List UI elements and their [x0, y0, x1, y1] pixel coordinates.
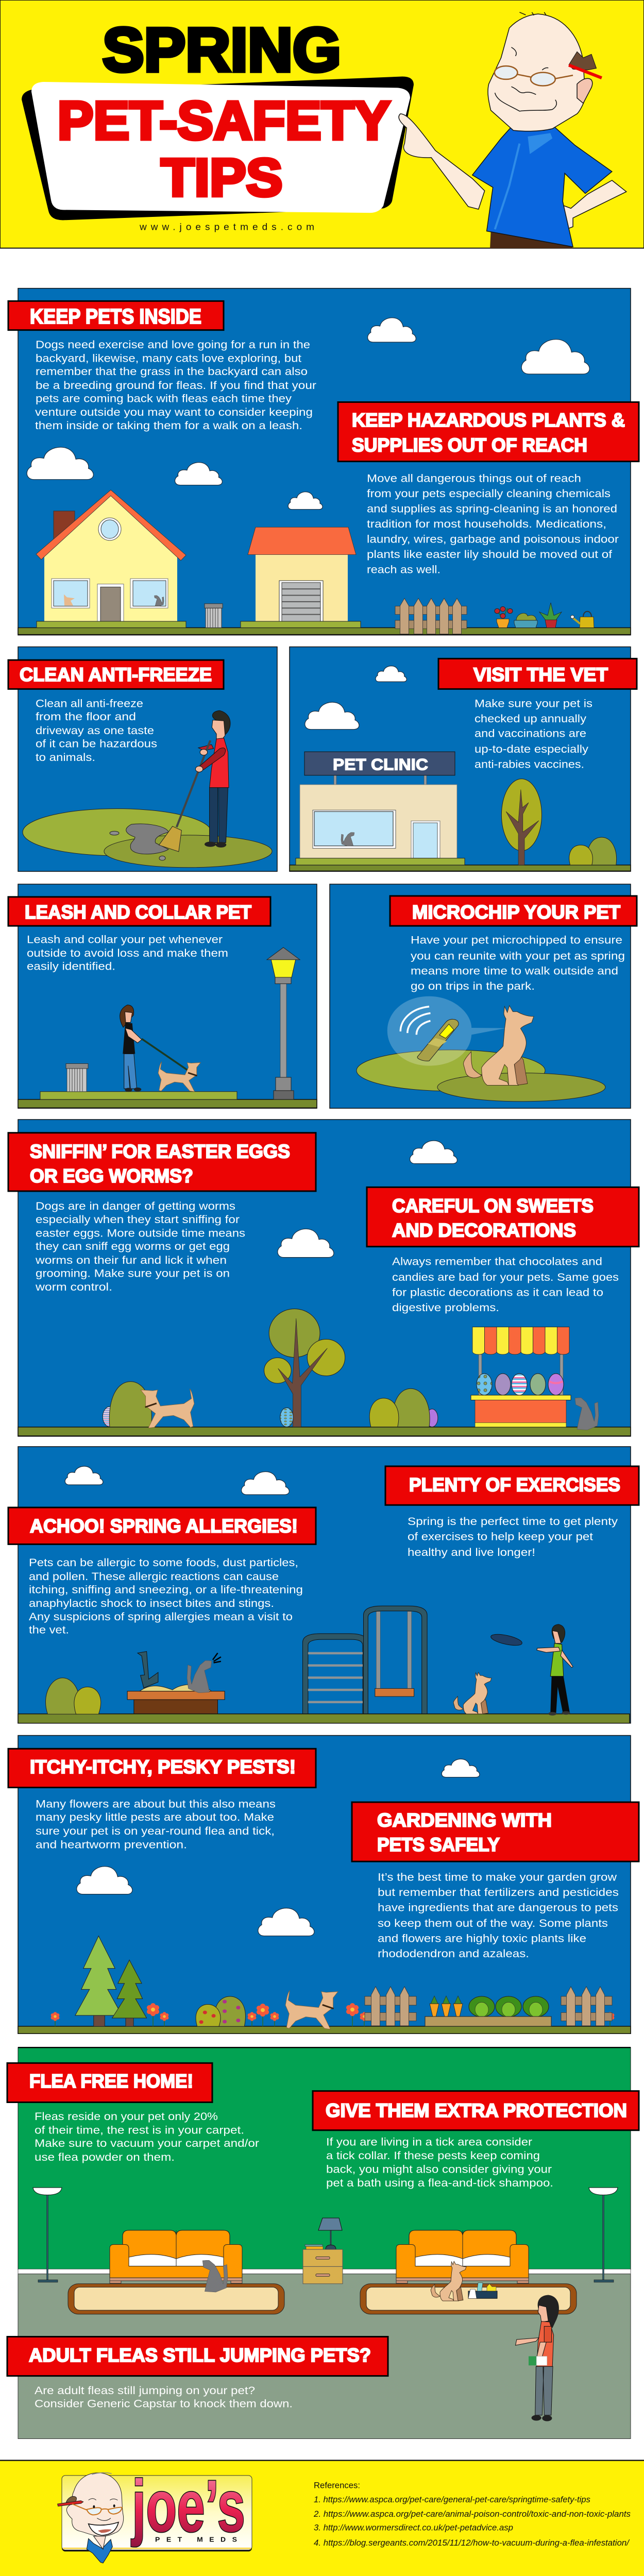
- title: tips: TIPS: [161, 149, 283, 208]
- text: leash and collar: outside to avoid loss and make them: [27, 947, 228, 959]
- heading: keep hazardous plants: SUPPLIES OUT OF REACH: [352, 435, 587, 456]
- text: clean anti-freeze: driveway as one taste: [36, 724, 154, 737]
- text: exercises: Spring is the perfect time to get plenty: [408, 1516, 618, 1528]
- text: allergies: the vet.: [29, 1624, 69, 1636]
- title: pet-safety: PET-SAFETY: [58, 90, 391, 150]
- text: flea free home: Make sure to vacuum your carpet and/or: [35, 2138, 259, 2149]
- illustration: tree and bushes: [501, 779, 617, 865]
- text: egg worms: worm control.: [35, 1281, 112, 1293]
- text: egg worms: [35, 1200, 245, 1293]
- logo mascot: [58, 2473, 124, 2563]
- text: egg worms: they can sniff egg worms or get egg: [36, 1241, 230, 1252]
- references: [313, 2481, 631, 2548]
- heading: clean anti-freeze: [8, 660, 224, 689]
- illustration: pine trees and berry bushes: [75, 1936, 245, 2026]
- text: sweets: for plastic decorations as it can lead to: [392, 1286, 603, 1299]
- clouds: [305, 666, 406, 730]
- clouds: [27, 318, 589, 510]
- references: 2. https://www.aspca.org/pet-care/animal-poison-control/toxic-and-non-toxic-plants: [313, 2509, 631, 2519]
- text: hazardous supplies: and supplies as spring-cleaning is an honored: [367, 503, 617, 515]
- text: hazardous supplies: [367, 472, 619, 576]
- text: egg worms: especially when they start sniffing for: [36, 1213, 240, 1226]
- text: clean anti-freeze: Clean all anti-freeze: [36, 698, 143, 709]
- heading: careful on sweets: CAREFUL ON SWEETS: [392, 1196, 594, 1217]
- heading: keep pets inside: KEEP PETS INSIDE: [30, 304, 201, 328]
- panel: keep pets inside and hazardous plants: [8, 289, 639, 635]
- text: microchip: [411, 934, 625, 992]
- text: gardening: [378, 1871, 619, 1960]
- illustration: flea bath kit: [468, 2283, 497, 2298]
- text: allergies: anaphylactic shock to insect bites and stings.: [29, 1598, 274, 1609]
- illustration: vegetable garden box: [425, 1996, 551, 2026]
- text: leash and collar: Leash and collar your pet whenever: [27, 934, 223, 945]
- text: gardening: It’s the best time to make your garden grow: [378, 1871, 617, 1883]
- panel: easter eggs and sweets: [8, 1120, 639, 1436]
- logo: joe's pet meds: [58, 2465, 252, 2563]
- illustration: easter egg stand: [471, 1327, 571, 1427]
- text: pests: many pesky little pests are about too. Make: [36, 1811, 274, 1823]
- illustration: trash can: [205, 604, 223, 628]
- text: microchip: go on trips in the park.: [411, 980, 535, 992]
- text: extra protection: pet a bath using a flea-and-tick shampoo.: [326, 2177, 553, 2189]
- text: clean anti-freeze: [36, 698, 157, 764]
- illustration: cat: [575, 1398, 599, 1430]
- text: microchip: Have your pet microchipped to ensure: [411, 934, 622, 946]
- heading: achoo spring allergies: [8, 1507, 316, 1544]
- illustration: sneezing cat: [187, 1660, 212, 1693]
- text: keep pets inside: remember that the grass in the backyard can also: [36, 366, 308, 378]
- heading: itchy-itchy: [8, 1749, 316, 1787]
- text: hazardous supplies: plants like easter lily should be moved out of: [367, 549, 612, 561]
- heading: visit the vet: VISIT THE VET: [473, 665, 608, 686]
- text: visit the vet: up-to-date especially: [474, 743, 588, 755]
- heading: microchip your pet: [390, 896, 637, 926]
- text: sweets: [392, 1256, 619, 1314]
- illustration: woman walking dog: [120, 1005, 193, 1092]
- heading: sniffin for easter eggs: OR EGG WORMS?: [30, 1166, 193, 1187]
- text: adult fleas: [35, 2384, 293, 2410]
- panel: visit the vet: [290, 647, 637, 871]
- clinic sign text: PET CLINIC: [333, 755, 428, 773]
- text: egg worms: worms on their fur and lick it when: [35, 1254, 227, 1266]
- heading: gardening with pets: [352, 1802, 639, 1861]
- illustration: walking dog: [285, 1991, 338, 2029]
- illustration: woman holding product: [515, 2295, 559, 2421]
- text: keep pets inside: backyard, likewise, many cats love exploring, but: [36, 352, 301, 364]
- text: keep pets inside: [35, 338, 316, 432]
- text: allergies: [29, 1557, 303, 1636]
- text: gardening: rhododendron and azaleas.: [378, 1947, 529, 1960]
- text: allergies: Pets can be allergic to some foods, dust particles,: [29, 1557, 298, 1569]
- panel: allergies and exercises: [8, 1447, 639, 1723]
- heading: plenty of exercises: PLENTY OF EXERCISES: [409, 1475, 620, 1496]
- illustration: person throwing frisbee: [537, 1624, 573, 1716]
- text: leash and collar: [27, 934, 228, 973]
- text: visit the vet: checked up annually: [474, 713, 586, 725]
- clouds: [65, 1466, 289, 1495]
- heading: plenty of exercises: [385, 1466, 639, 1505]
- panel: clean anti-freeze: [8, 647, 277, 871]
- text: flea free home: Fleas reside on your pet only 20%: [35, 2110, 218, 2123]
- heading: flea free home: [7, 2063, 212, 2103]
- heading: visit the vet: [438, 658, 637, 689]
- illustration: microchip callout: [387, 996, 506, 1066]
- header banner: [0, 0, 644, 248]
- text: gardening: so keep them out of the way. Some plants: [378, 1917, 608, 1929]
- heading: gardening with pets: PETS SAFELY: [377, 1835, 500, 1856]
- illustration: dog on leash: [158, 1062, 200, 1092]
- text: exercises: [408, 1516, 618, 1558]
- heading: achoo spring allergies: ACHOO! SPRING ALLERGIES!: [30, 1516, 298, 1537]
- text: sweets: digestive problems.: [392, 1302, 499, 1314]
- text: clean anti-freeze: to animals.: [36, 752, 95, 764]
- illustration: wooden fence: [395, 598, 467, 634]
- text: exercises: of exercises to help keep your pet: [408, 1531, 593, 1543]
- illustration: garage: [241, 527, 361, 628]
- sign board: [22, 76, 414, 220]
- text: microchip: means more time to walk outside and: [411, 965, 618, 977]
- text: flea free home: use flea powder on them.: [35, 2151, 175, 2163]
- references: References:: [314, 2481, 360, 2490]
- text: flea free home: [35, 2110, 259, 2163]
- text: hazardous supplies: reach as well.: [367, 564, 440, 576]
- clouds: [278, 1141, 457, 1258]
- text: allergies: itching, sniffing and sneezing, or a life-threatening: [29, 1584, 303, 1596]
- text: extra protection: back, you might also consider giving your: [326, 2163, 552, 2175]
- illustration: sitting dog: [464, 1006, 534, 1085]
- illustration: potted plants and watering can: [495, 603, 594, 628]
- text: gardening: but remember that fertilizers and pesticides: [378, 1886, 619, 1899]
- text: keep pets inside: be a breeding ground for fleas. If you find that your: [36, 379, 316, 392]
- panel: microchip your pet: [330, 884, 637, 1108]
- heading: keep hazardous plants: KEEP HAZARDOUS PLANTS &: [352, 410, 625, 431]
- text: visit the vet: and vaccinations are: [474, 727, 586, 739]
- heading: sniffin for easter eggs: SNIFFIN’ FOR EASTER EGGS: [30, 1141, 290, 1162]
- illustration: sofas and rugs: [68, 2230, 577, 2314]
- title: spring: SPRING: [103, 16, 341, 84]
- text: gardening: have ingredients that are dangerous to pets: [378, 1902, 618, 1913]
- text: microchip: you can reunite with your pet as spring: [411, 950, 625, 962]
- illustration: frisbee: [490, 1632, 523, 1648]
- clouds: [77, 1759, 480, 1936]
- text: keep pets inside: venture outside you may want to consider keeping: [35, 406, 313, 418]
- text: hazardous supplies: laundry, wires, garbage and poisonous indoor: [367, 533, 619, 546]
- heading: keep hazardous plants: [338, 402, 639, 462]
- text: adult fleas: Consider Generic Capstar to knock them down.: [35, 2398, 293, 2410]
- text: visit the vet: [474, 698, 592, 770]
- text: extra protection: a tick collar. If these pests keep coming: [326, 2149, 540, 2162]
- heading: give them extra protection: GIVE THEM EXTRA PROTECTION: [326, 2100, 627, 2122]
- text: allergies: Any suspicions of spring allergies mean a visit to: [29, 1611, 293, 1623]
- text: leash and collar: easily identified.: [27, 960, 115, 973]
- website url: www.joespetmeds.com: [139, 222, 314, 232]
- text: egg worms: easter eggs. More outside time means: [36, 1227, 245, 1239]
- heading: adult fleas: ADULT FLEAS STILL JUMPING PETS?: [29, 2345, 371, 2366]
- text: keep pets inside: them inside or taking them for a walk on a leash.: [35, 419, 302, 432]
- text: gardening: and flowers are highly toxic plants like: [378, 1933, 586, 1944]
- illustration: lawn and trash can: [40, 1064, 237, 1099]
- heading: leash and collar pet: [8, 897, 270, 926]
- panel: leash and collar pet: [8, 884, 317, 1108]
- heading: clean anti-freeze: CLEAN ANTI-FREEZE: [20, 665, 212, 686]
- mascot: joe pointing at sign: [399, 12, 626, 248]
- illustration: cat on sofa: [202, 2260, 228, 2292]
- text: clean anti-freeze: of it can be hazardous: [36, 738, 157, 750]
- heading: gardening with pets: GARDENING WITH: [377, 1810, 552, 1831]
- illustration: lawn: [357, 1050, 605, 1101]
- text: allergies: and pollen. These allergic reactions can cause: [29, 1570, 279, 1583]
- illustration: floor lamps: [33, 2188, 618, 2282]
- text: sweets: Always remember that chocolates and: [392, 1256, 602, 1268]
- illustration: tree, bushes and hidden eggs: [103, 1309, 438, 1427]
- illustration: person sweeping: [159, 710, 230, 852]
- text: egg worms: grooming. Make sure your pet is on: [36, 1267, 230, 1279]
- heading: flea free home: FLEA FREE HOME!: [29, 2071, 193, 2092]
- logo subtitle: PET MEDS: [155, 2536, 237, 2543]
- text: extra protection: [326, 2136, 553, 2189]
- heading: careful on sweets: [367, 1187, 639, 1247]
- text: flea free home: of their time, the rest is in your carpet.: [35, 2124, 244, 2136]
- heading: itchy-itchy: ITCHY-ITCHY, PESKY PESTS!: [30, 1757, 296, 1778]
- heading: adult fleas: [7, 2337, 388, 2376]
- illustration: pet clinic building: [296, 752, 465, 865]
- text: hazardous supplies: tradition for most households. Medications,: [367, 518, 606, 530]
- text: hazardous supplies: Move all dangerous things out of reach: [367, 472, 581, 485]
- logo wordmark: joe’s: [131, 2465, 245, 2548]
- heading: sniffin for easter eggs: [8, 1133, 316, 1191]
- illustration: yellow house: [36, 490, 186, 628]
- illustration: dog catching frisbee: [453, 1672, 492, 1714]
- illustration: sniffing dog: [141, 1389, 194, 1428]
- illustration: dog on sofa rug: [431, 2261, 466, 2301]
- text: visit the vet: anti-rabies vaccines.: [474, 758, 584, 770]
- text: egg worms: Dogs are in danger of getting worms: [36, 1200, 235, 1212]
- illustration: nightstand and table lamp: [303, 2218, 343, 2284]
- heading: careful on sweets: AND DECORATIONS: [392, 1220, 576, 1241]
- text: pests: sure your pet is on year-round flea and tick,: [36, 1825, 275, 1837]
- text: adult fleas: Are adult fleas still jumping on your pet?: [35, 2384, 255, 2397]
- text: pests: and heartworm prevention.: [36, 1839, 187, 1851]
- illustration: fences: [365, 1987, 612, 2026]
- references: 1. https://www.aspca.org/pet-care/general-pet-care/springtime-safety-tips: [314, 2495, 590, 2504]
- illustration: playground, sandbox and bushes: [45, 1606, 427, 1714]
- text: keep pets inside: pets are coming back with fleas each time they: [36, 393, 292, 404]
- text: visit the vet: Make sure your pet is: [474, 698, 592, 709]
- illustration: flowers: [51, 2003, 614, 2026]
- text: sweets: candies are bad for your pets. Same goes: [392, 1272, 619, 1283]
- text: pests: Many flowers are about but this also means: [36, 1798, 276, 1810]
- heading: give them extra protection: [313, 2091, 639, 2130]
- text: exercises: healthy and live longer!: [408, 1547, 535, 1558]
- panel: pesky pests and gardening: [8, 1736, 639, 2033]
- footer banner: [0, 2460, 644, 2576]
- references: 4. https://blog.sergeants.com/2015/11/12/how-to-vacuum-during-a-flea-infestation/: [314, 2538, 630, 2548]
- illustration: lawn and spill: [23, 809, 272, 868]
- text: extra protection: If you are living in a tick area consider: [326, 2136, 532, 2148]
- panel: living room flea tips: [7, 2047, 639, 2438]
- references: 3. http://www.wormersdirect.co.uk/pet-petadvice.asp: [314, 2523, 513, 2532]
- heading: leash and collar pet: LEASH AND COLLAR PET: [25, 902, 251, 923]
- heading: microchip your pet: MICROCHIP YOUR PET: [412, 902, 620, 923]
- text: hazardous supplies: from your pets especially cleaning chemicals: [367, 488, 611, 500]
- illustration: street lamp: [267, 947, 300, 1099]
- text: keep pets inside: Dogs need exercise and love going for a run in the: [36, 338, 310, 351]
- text: pests: [36, 1798, 276, 1851]
- text: clean anti-freeze: from the floor and: [36, 711, 136, 723]
